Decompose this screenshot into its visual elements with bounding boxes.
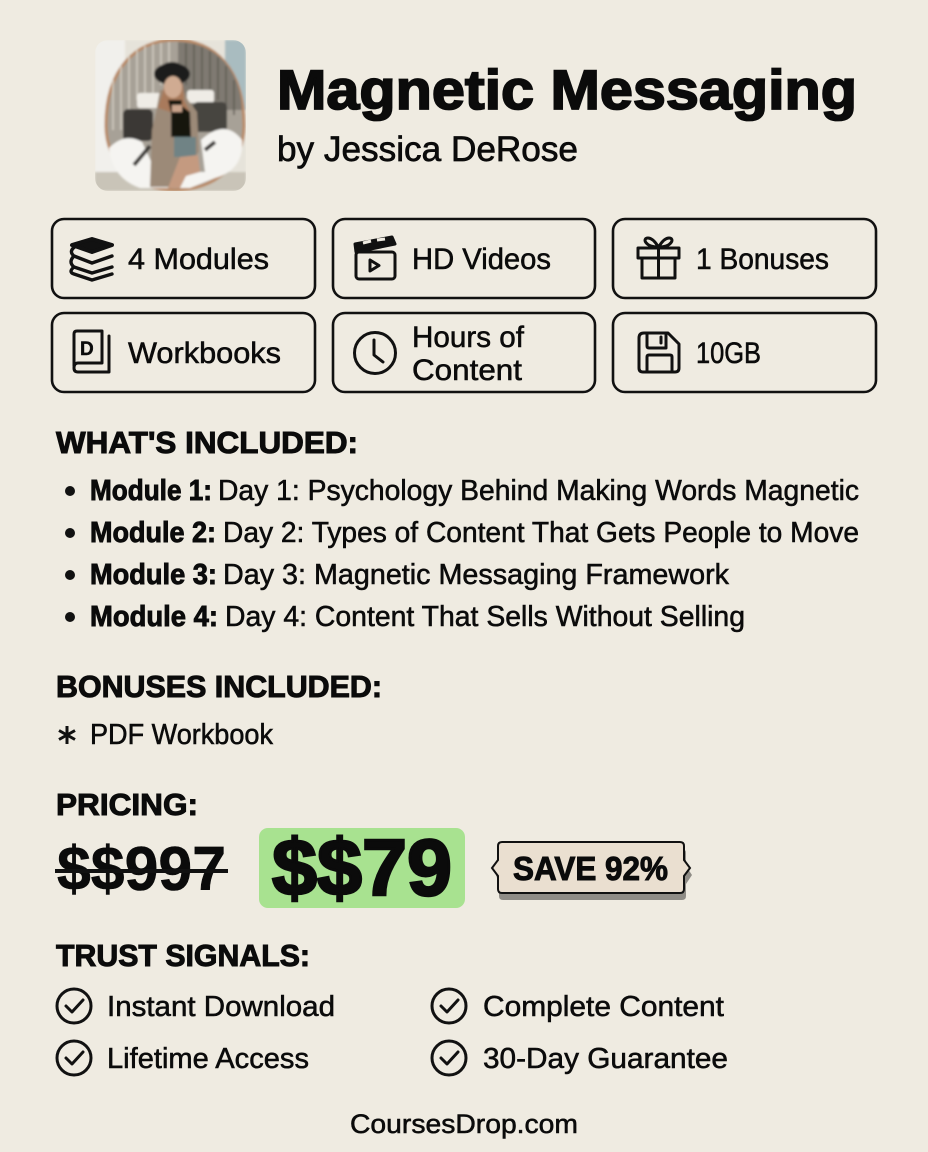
icon: workbook: D [80,339,94,360]
bonus item: PDF Workbook [90,719,273,751]
feature card: 10GB: 10GB [696,337,761,370]
icon: clock [354,332,396,374]
heading: bonuses included: BONUSES INCLUDED: [56,669,382,704]
module 2: Module 2: [90,517,216,549]
heading: trust signals: TRUST SIGNALS: [56,938,310,973]
feature card: 4 Modules: 4 Modules [128,243,269,276]
module 3: Module 3: [90,559,217,591]
icon: workbook [74,331,109,372]
feature card: Workbooks [52,313,315,392]
module 1: Module 1: [90,475,212,507]
trust: complete content: Complete Content [483,991,724,1023]
module 4: Day 4: Content That Sells Without Selling [225,601,745,633]
feature card: HD Videos: HD Videos [412,243,551,276]
trust: lifetime access: Lifetime Access [107,1043,309,1075]
module list [65,475,859,633]
feature card: Hours of Content: Content [412,354,523,387]
trust: instant download: Instant Download [107,991,335,1023]
feature card: HD Videos [333,219,595,298]
icon: floppy disk [639,333,679,372]
module 1: Day 1: Psychology Behind Making Words Magnetic [218,475,859,507]
icon: gift box [638,238,679,278]
subtitle: by Jessica DeRose [277,130,578,169]
new price: $$79 [272,823,452,912]
feature card: 4 Modules [52,219,315,298]
footer: CoursesDrop.com [350,1109,578,1139]
module 2: Day 2: Types of Content That Gets People to Move [223,517,859,549]
title: Magnetic Messaging [277,58,857,121]
feature card: Hours of Content: Hours of [412,321,525,354]
photo: woman in hanging egg chair [95,40,246,191]
old price: $$997 [57,835,226,904]
icon: stack of books [71,239,112,280]
module 4: Module 4: [90,601,218,633]
module 3: Day 3: Magnetic Messaging Framework [223,559,729,591]
trust: 30-day guarantee: 30-Day Guarantee [483,1043,728,1075]
feature card: 1 Bonuses [613,219,876,298]
heading: pricing: PRICING: [56,787,198,822]
feature card: 1 Bonuses: 1 Bonuses [696,243,829,276]
feature card: Hours of Content [333,313,595,392]
icon: clapperboard [355,237,395,279]
heading: what's included: WHAT'S INCLUDED: [56,425,358,460]
badge: save 92% [492,842,692,900]
badge: save 92%: SAVE 92% [513,850,668,887]
feature card: 10GB [613,313,876,392]
feature card: Workbooks: Workbooks [128,337,281,370]
